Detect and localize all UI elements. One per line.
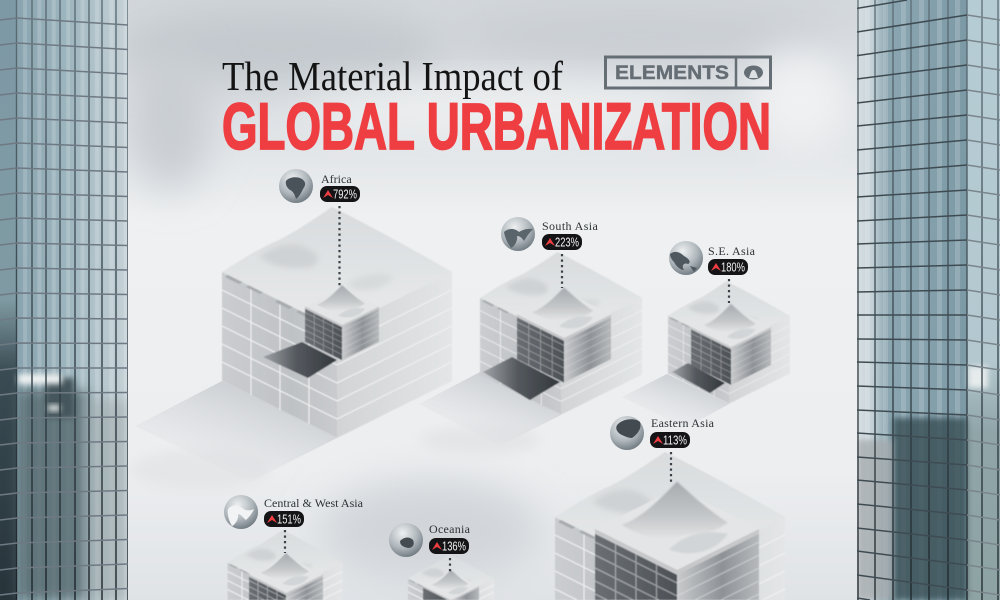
growth pill: 223%: [555, 234, 579, 250]
growth pill: 136%: [442, 538, 466, 554]
label: Africa: [279, 169, 360, 286]
region name: Africa: [321, 172, 352, 186]
cube: Eastern Asia: [555, 452, 785, 600]
growth pill: 151%: [277, 512, 301, 526]
icon: S.E. Asia globe: [669, 241, 703, 275]
cube: Central and West Asia: [228, 530, 342, 600]
label: South Asia: [501, 217, 598, 288]
icon: Central and West Asia globe: [224, 495, 258, 529]
title line two: GLOBAL URBANIZATION: [222, 89, 771, 163]
icon: Eastern Asia globe: [610, 416, 644, 450]
dotted leader: [561, 254, 563, 288]
label: S.E. Asia: [669, 241, 756, 303]
icon: Oceania globe: [389, 523, 423, 557]
growth pill: 792%: [333, 186, 357, 202]
label: Central and West Asia: [224, 495, 364, 553]
logo: Elements: ELEMENTS: [615, 63, 729, 84]
region name: Central & West Asia: [264, 496, 364, 510]
cube: Oceania: [408, 554, 494, 600]
label: Oceania: [389, 522, 471, 572]
cube: South Asia: [480, 252, 642, 415]
dotted leader: [449, 558, 451, 572]
building: right glass tower: [857, 0, 1000, 600]
icon: South Asia globe: [501, 217, 535, 251]
building: left glass tower: [0, 0, 128, 600]
logo: Elements: [606, 57, 770, 88]
cube: Africa: [222, 207, 452, 438]
icon: Africa globe: [279, 169, 313, 203]
dotted leader: [728, 279, 730, 303]
growth pill: 180%: [721, 260, 745, 274]
region name: S.E. Asia: [708, 244, 756, 258]
cube: S.E. Asia: [668, 281, 790, 404]
title: [222, 53, 771, 163]
region name: South Asia: [542, 219, 598, 233]
dotted leader: [670, 452, 672, 485]
growth pill: 113%: [663, 432, 687, 448]
label: Eastern Asia: [610, 416, 715, 485]
cast shadows under cubes: [135, 372, 729, 482]
region name: Oceania: [429, 522, 471, 536]
region name: Eastern Asia: [651, 416, 715, 430]
dotted leader: [338, 206, 341, 286]
dotted leader: [284, 530, 286, 553]
title line one: The Material Impact of: [222, 53, 563, 99]
